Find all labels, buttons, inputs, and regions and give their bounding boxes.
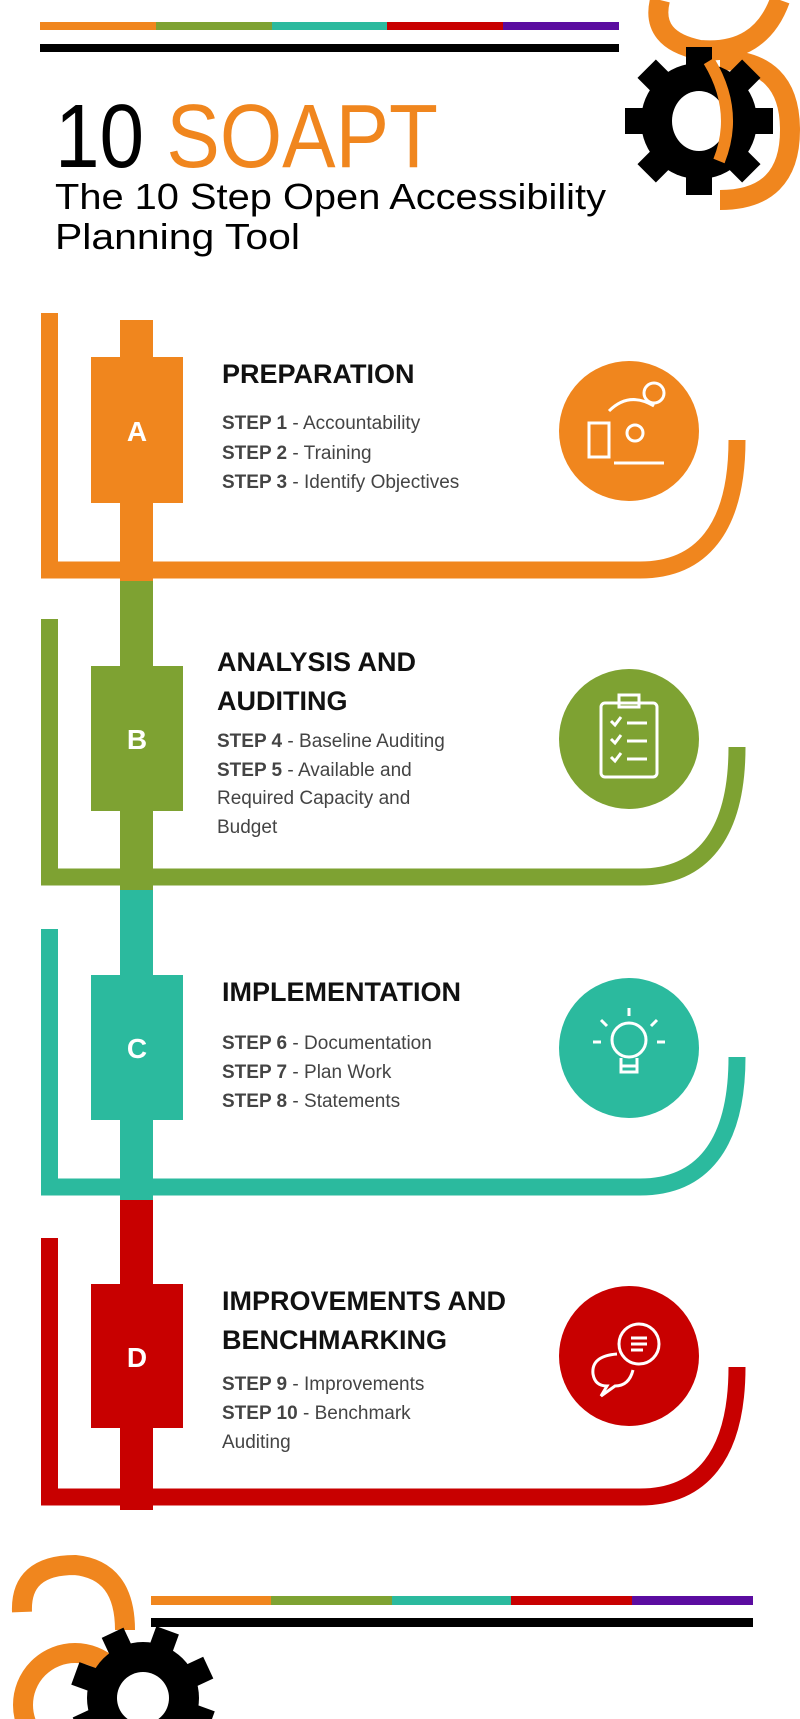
heading D: BENCHMARKING [222,1325,447,1355]
icon: clipboard [559,669,699,809]
icon: gear bottom [71,1626,215,1719]
steps C [222,1033,432,1112]
steps C: STEP 8 - Statements [222,1091,400,1112]
icon: planning [559,361,699,501]
title: 10 SOAPT [55,87,438,187]
steps D: Auditing [222,1432,291,1453]
spine [120,320,153,1510]
heading C: IMPLEMENTATION [222,977,461,1007]
heading A: PREPARATION [222,359,415,389]
box C [91,975,183,1120]
box D: D [127,1342,147,1373]
steps B: STEP 5 - Available and [217,760,412,781]
top color bar [40,22,619,52]
panel D: improvements and benchmarking [50,1238,737,1497]
heading D: IMPROVEMENTS AND [222,1286,506,1316]
box B [91,666,183,811]
heading D [222,1286,506,1355]
steps D: STEP 9 - Improvements [222,1374,424,1395]
top decorative open-access logo [658,0,790,200]
heading B [217,647,416,716]
steps A: STEP 3 - Identify Objectives [222,472,459,493]
box C: C [127,1033,147,1064]
steps C: STEP 7 - Plan Work [222,1062,392,1083]
box B: B [127,724,147,755]
steps A [222,413,459,493]
icon: open access logo bottom [22,1565,127,1719]
box A: A [127,416,147,447]
icon: chat bubbles [559,1286,699,1426]
steps B: STEP 4 - Baseline Auditing [217,731,445,752]
steps C: STEP 6 - Documentation [222,1033,432,1054]
box D [91,1284,183,1428]
steps A: STEP 2 - Training [222,443,372,464]
steps D [222,1374,424,1453]
steps B: Budget [217,817,278,838]
heading B: AUDITING [217,686,348,716]
icon: lightbulb [559,978,699,1118]
panel A: preparation [50,313,737,570]
heading B: ANALYSIS AND [217,647,416,677]
steps B [217,731,445,838]
box A [91,357,183,503]
panel B: analysis and auditing [50,619,737,877]
title [55,87,606,257]
title: Planning Tool [55,216,300,257]
panel C: implementation [50,929,737,1187]
steps A: STEP 1 - Accountability [222,413,421,434]
steps D: STEP 10 - Benchmark [222,1403,411,1424]
steps B: Required Capacity and [217,788,410,809]
bottom color bar [151,1596,753,1627]
title: The 10 Step Open Accessibility [55,176,606,217]
icon: gear top [625,47,773,195]
